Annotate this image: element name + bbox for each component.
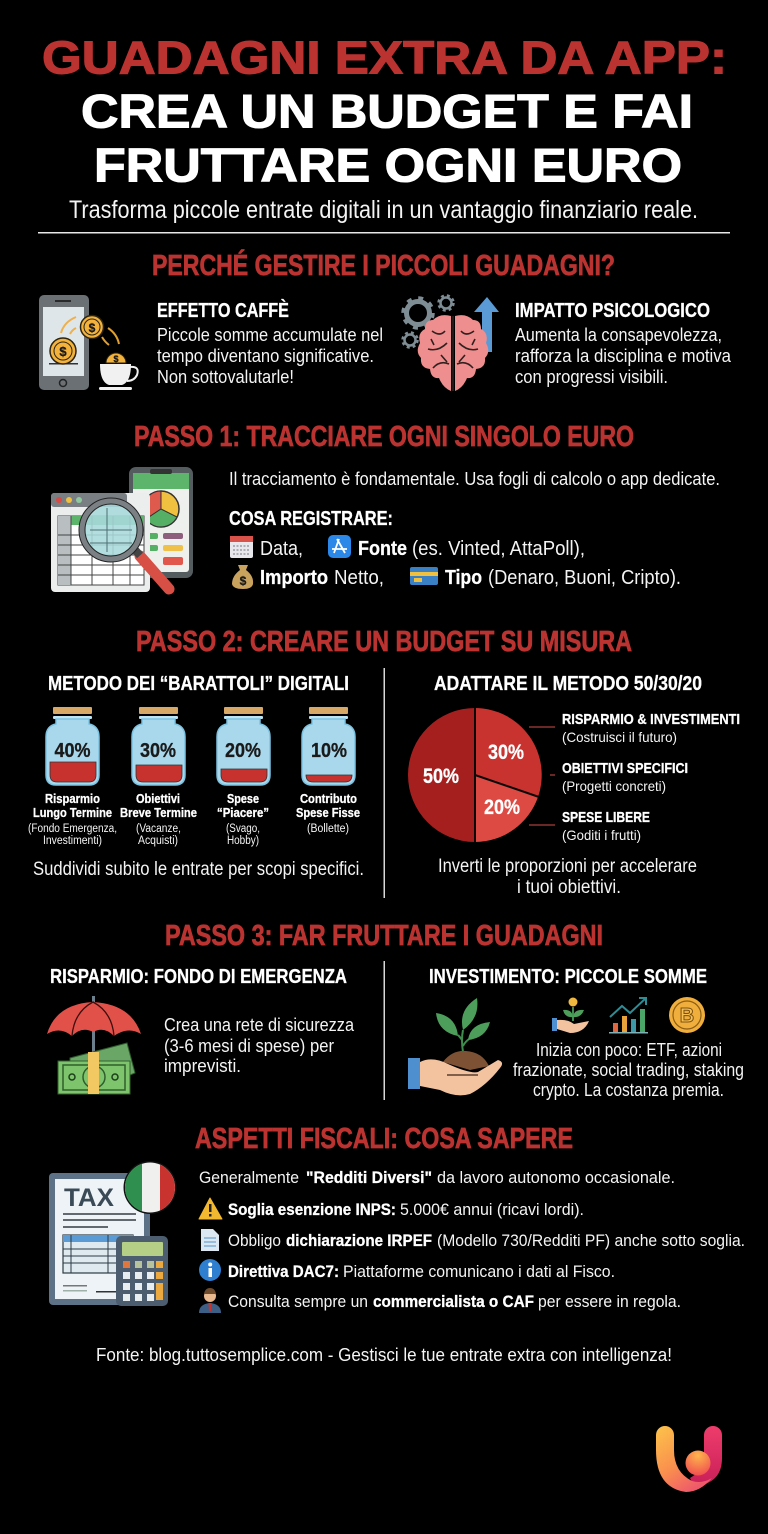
- text: obbligo irpef: [228, 1231, 745, 1250]
- text: effetto caffè: Non sottovalutarle!: [157, 367, 294, 387]
- icon: bitcoin: B: [680, 1005, 694, 1027]
- text: crea una rete: Crea una rete di sicurezza: [164, 1015, 355, 1035]
- logo: [656, 1426, 722, 1492]
- text: consulta: Consulta sempre un: [228, 1292, 368, 1311]
- jar label: spese piacere: Hobby): [227, 835, 259, 847]
- pie chart 50/30/20: [408, 708, 542, 842]
- text: consulta: per essere in regola.: [538, 1292, 681, 1311]
- text: crea una rete: imprevisti.: [164, 1056, 241, 1076]
- text: effetto caffè: EFFETTO CAFFÈ: [157, 299, 289, 322]
- heading: metodo barattoli: METODO DEI “BARATTOLI” DIGITALI: [48, 673, 349, 695]
- text: tipo: Tipo: [445, 567, 482, 589]
- jar label: obiettivi: Acquisti): [138, 835, 178, 847]
- jar 10%: [302, 707, 355, 785]
- title: FRUTTARE OGNI EURO: [94, 138, 682, 192]
- icon: calendar: [230, 536, 253, 558]
- text: effetto caffè: [157, 299, 383, 387]
- heading: investimento: INVESTIMENTO: PICCOLE SOMME: [429, 966, 707, 988]
- icon: plant in hand: [408, 998, 502, 1095]
- text: importo: Importo: [260, 567, 328, 589]
- jar label: obiettivi: (Vacanze,: [136, 823, 181, 835]
- title: GUADAGNI EXTRA DA APP:: [42, 32, 727, 84]
- text: redditi diversi: da lavoro autonomo occasionale.: [437, 1168, 675, 1187]
- icon: info: [199, 1259, 221, 1281]
- text: soglia inps: Soglia esenzione INPS:: [228, 1200, 396, 1219]
- title: [42, 32, 727, 192]
- pie legend: OBIETTIVI SPECIFICI: [562, 761, 688, 777]
- text: redditi diversi: Generalmente: [199, 1168, 299, 1187]
- icon: document: [201, 1229, 219, 1251]
- pie legend: (Goditi i frutti): [562, 827, 641, 843]
- heading: aspetti fiscali: ASPETTI FISCALI: COSA SAPERE: [195, 1123, 573, 1155]
- jar label: contributo: (Bollette): [307, 823, 349, 835]
- text: impatto psicologico: IMPATTO PSICOLOGICO: [515, 300, 710, 322]
- icon: growth chart: [609, 998, 648, 1034]
- pie legend: [529, 712, 740, 843]
- jar label: spese piacere: (Svago,: [226, 823, 260, 835]
- text: obbligo irpef: dichiarazione IRPEF: [286, 1231, 432, 1250]
- text: consulta: [228, 1292, 681, 1311]
- text: impatto psicologico: [515, 300, 732, 387]
- icon: phone with coins and coffee: $: [89, 321, 96, 335]
- jar 40%: 40%: [54, 740, 91, 762]
- text: effetto caffè: tempo diventano significative.: [157, 346, 374, 366]
- text: effetto caffè: Piccole somme accumulate nel: [157, 325, 383, 345]
- heading: risparmio fondo: RISPARMIO: FONDO DI EMERGENZA: [50, 966, 347, 988]
- text: redditi diversi: [199, 1168, 675, 1187]
- jar label: contributo: Spese Fisse: [296, 806, 360, 820]
- icon: brain with gears and arrow: [402, 296, 499, 391]
- text: inverti: Inverti le proporzioni per accelerare: [438, 856, 697, 877]
- text: crea una rete: [164, 1015, 355, 1076]
- text: suddividi: Suddividi subito le entrate per scopi specifici.: [33, 859, 364, 880]
- pie legend: (Costruisci il futuro): [562, 729, 677, 745]
- text: inizia con poco: Inizia con poco: ETF, azioni: [536, 1040, 722, 1060]
- pie chart 50/30/20: 30%: [488, 741, 524, 764]
- pie legend: (Progetti concreti): [562, 778, 666, 794]
- text: consulta: commercialista o CAF: [373, 1292, 534, 1311]
- jar label: spese piacere: “Piacere”: [217, 806, 269, 820]
- icon: money bag: $: [240, 574, 247, 588]
- text: obbligo irpef: Obbligo: [228, 1231, 281, 1250]
- icon: warning: [199, 1198, 222, 1219]
- text: soglia inps: 5.000€ annui (ricavi lordi).: [400, 1200, 584, 1219]
- text: inverti: i tuoi obiettivi.: [517, 877, 621, 898]
- text: inizia con poco: frazionate, social trading, staking: [513, 1060, 744, 1080]
- text: tipo: (Denaro, Buoni, Cripto).: [488, 567, 681, 589]
- icon: card: [410, 567, 438, 585]
- jar label: contributo: [296, 792, 360, 835]
- text: direttiva dac7: Direttiva DAC7:: [228, 1262, 339, 1281]
- icon: spreadsheet, phone and magnifier: [51, 467, 193, 592]
- title: CREA UN BUDGET E FAI: [81, 84, 693, 138]
- heading: passo 3: PASSO 3: FAR FRUTTARE I GUADAGNI: [165, 920, 603, 952]
- jar label: risparmio: (Fondo Emergenza,: [28, 823, 117, 835]
- text: crea una rete: (3-6 mesi di spese) per: [164, 1036, 334, 1056]
- jar 20%: 20%: [225, 740, 261, 762]
- text: impatto psicologico: con progressi visibili.: [515, 367, 668, 387]
- text: direttiva dac7: Piattaforme comunicano i dati al Fisco.: [343, 1262, 615, 1281]
- text: redditi diversi: "Redditi Diversi": [306, 1168, 432, 1187]
- icon: money bag: [232, 565, 253, 589]
- pie legend: RISPARMIO & INVESTIMENTI: [562, 712, 740, 728]
- jar label: risparmio: Investimenti): [43, 835, 102, 847]
- pie legend: SPESE LIBERE: [562, 810, 650, 826]
- icon: bitcoin: [669, 997, 705, 1033]
- text: tracciamento: Il tracciamento è fondamentale. Usa fogli di calcolo o app dedicate.: [229, 469, 720, 489]
- text: inizia con poco: [513, 1040, 744, 1100]
- icon: tax document, flag, calculator: TAX: [64, 1184, 114, 1212]
- jar label: contributo: Contributo: [300, 792, 357, 806]
- text: soglia inps: [228, 1200, 584, 1219]
- icon: tax document, flag, calculator: [49, 1161, 176, 1306]
- text: fonte: (es. Vinted, AttaPoll),: [412, 538, 585, 560]
- text: impatto psicologico: rafforza la disciplina e motiva: [515, 346, 732, 366]
- text: obbligo irpef: (Modello 730/Redditi PF) anche sotto soglia.: [437, 1231, 745, 1250]
- text: fonte: Fonte: [358, 538, 407, 560]
- jar label: risparmio: [28, 792, 117, 847]
- jar 40%: [46, 707, 99, 785]
- heading: adattare il metodo: ADATTARE IL METODO 50/30/20: [434, 673, 702, 695]
- jar label: spese piacere: Spese: [227, 792, 259, 806]
- jar label: risparmio: Lungo Termine: [33, 806, 112, 820]
- pie chart 50/30/20: 20%: [484, 796, 520, 819]
- text: inizia con poco: crypto. La costanza premia.: [533, 1080, 724, 1100]
- icon: app store: [328, 535, 351, 558]
- text: importo: Netto,: [334, 567, 384, 589]
- source line: Fonte: blog.tuttosemplice.com - Gestisci le tue entrate extra con intelligenza!: [96, 1345, 672, 1365]
- text: importo: [260, 567, 384, 589]
- heading: passo 2: PASSO 2: CREARE UN BUDGET SU MISURA: [136, 626, 632, 658]
- jar label: spese piacere: [217, 792, 269, 847]
- icon: phone with coins and coffee: $: [113, 354, 119, 364]
- heading: passo 1: PASSO 1: TRACCIARE OGNI SINGOLO EURO: [134, 421, 634, 453]
- text: inverti: [438, 856, 697, 898]
- text: direttiva dac7: [228, 1262, 615, 1281]
- icon: phone with coins and coffee: [39, 295, 138, 390]
- icon: phone with coins and coffee: $: [59, 344, 67, 359]
- jar label: obiettivi: [120, 792, 197, 847]
- jar 10%: 10%: [311, 740, 347, 762]
- text: impatto psicologico: Aumenta la consapevolezza,: [515, 325, 722, 345]
- jar 30%: 30%: [140, 740, 176, 762]
- text: cosa registrare: COSA REGISTRARE:: [229, 508, 393, 530]
- heading: perché gestire: PERCHÉ GESTIRE I PICCOLI GUADAGNI?: [152, 250, 615, 282]
- jar 20%: [217, 707, 270, 785]
- icon: umbrella and cash: [47, 996, 141, 1094]
- jar label: risparmio: Risparmio: [45, 792, 100, 806]
- text: data: Data,: [260, 538, 303, 560]
- pie chart 50/30/20: 50%: [423, 765, 459, 788]
- jar label: obiettivi: Obiettivi: [136, 792, 180, 806]
- icon: consultant: [199, 1288, 221, 1313]
- jar label: obiettivi: Breve Termine: [120, 806, 197, 820]
- icon: sprout hand: [552, 998, 589, 1033]
- jar 30%: [132, 707, 185, 785]
